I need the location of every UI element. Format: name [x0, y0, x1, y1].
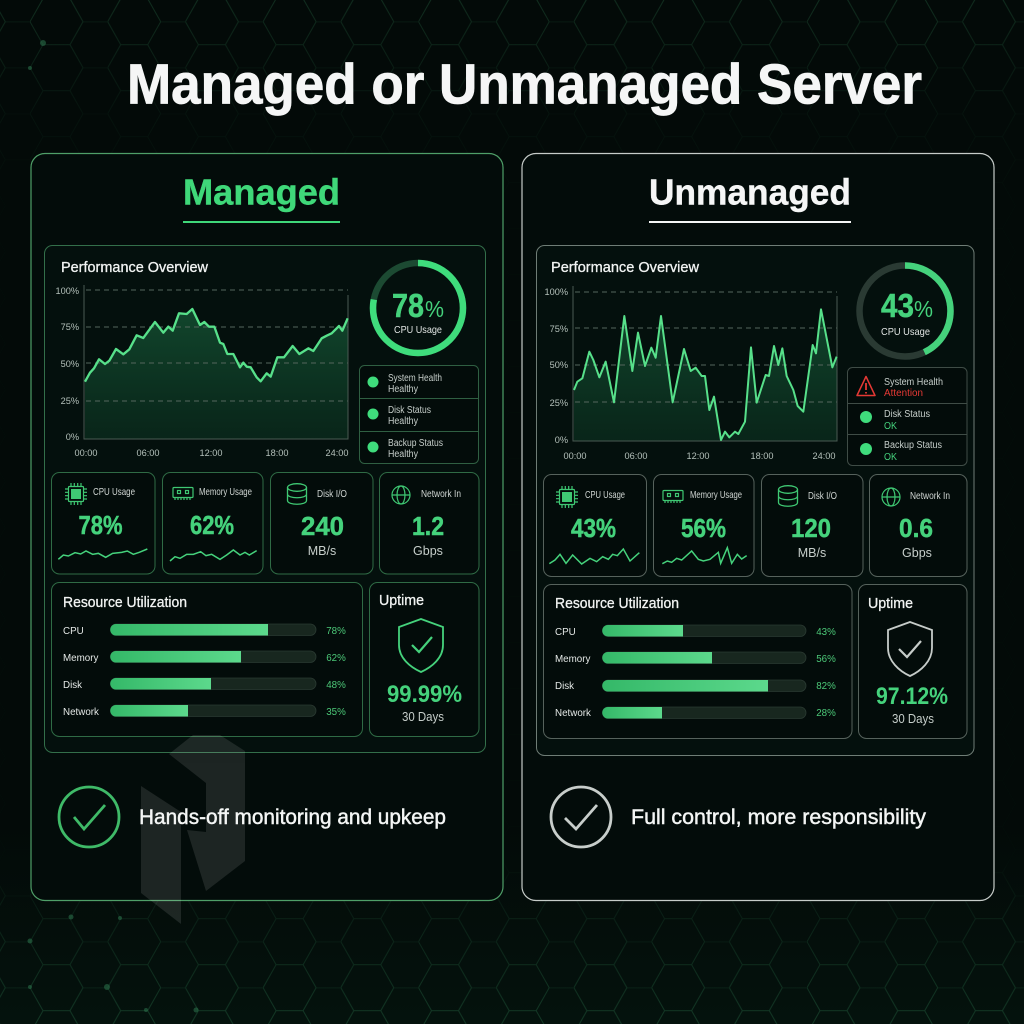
status list: Disk Status: [884, 409, 930, 420]
heading: managed: Managed: [183, 172, 340, 212]
bar: memory: [555, 652, 836, 665]
gauge: cpu usage 43%: 43: [881, 287, 914, 324]
bar: network: [555, 707, 836, 719]
sparkline: [58, 549, 147, 559]
metric card: network in: Gbps: [413, 544, 443, 558]
bar: cpu: CPU: [63, 626, 84, 637]
icon: memory: [663, 490, 683, 503]
metric card: memory usage: [654, 474, 754, 576]
status list: System Health: [388, 373, 442, 384]
panel: resource utilization: Resource Utilization: [555, 596, 679, 612]
callout: unmanaged: [551, 787, 926, 847]
metric card: disk io: MB/s: [308, 544, 336, 558]
panel: uptime: Uptime: [379, 592, 424, 609]
metric card: memory usage: [162, 472, 263, 574]
title: Managed or Unmanaged Server: [127, 52, 922, 116]
bar: network: 35%: [326, 707, 346, 718]
metric card: cpu usage: 78%: [78, 510, 122, 540]
metric card: network in: 1.2: [412, 511, 444, 541]
heading: performance overview: Performance Overview: [551, 260, 700, 276]
metric card: network in: [870, 474, 967, 576]
line chart: performance: 00:00: [74, 448, 98, 458]
callout: managed: [59, 787, 446, 847]
icon: database: [288, 484, 306, 504]
icon: shield: [399, 619, 443, 672]
panel: resource utilization: [544, 584, 852, 738]
sparkline: [170, 550, 257, 561]
status list: Backup Status: [388, 438, 443, 449]
status list: OK: [884, 452, 897, 463]
metric card: disk io: Disk I/O: [808, 490, 837, 502]
bar: memory: Memory: [63, 653, 98, 664]
metric card: network in: [380, 472, 479, 574]
icon: shield: [888, 622, 932, 676]
bar: network: Network: [555, 708, 591, 719]
panel: uptime: Uptime: [868, 595, 913, 612]
bar: disk: Disk: [555, 681, 574, 692]
panel: uptime: 30 Days: [402, 710, 444, 724]
bar: cpu: 43%: [816, 627, 836, 638]
line chart: performance: 25%: [61, 396, 79, 406]
gauge: cpu usage 43%: [860, 266, 950, 356]
metric card: network in: Network In: [910, 490, 950, 502]
metric card: memory usage: 56%: [681, 513, 726, 543]
status list: Healthy: [388, 449, 418, 460]
line chart: performance: 100%: [56, 286, 79, 296]
bar: disk: [63, 678, 346, 691]
gauge: cpu usage 78%: %: [425, 296, 444, 322]
dashboard: managed: [44, 246, 486, 752]
metric card: memory usage: Memory Usage: [690, 489, 742, 501]
panel: uptime: 30 Days: [892, 712, 934, 726]
line chart: performance: 06:00: [136, 448, 160, 458]
metric card: cpu usage: 43%: [571, 513, 616, 543]
bar: network: 28%: [816, 708, 836, 719]
metric card: disk io: 240: [301, 511, 344, 541]
status list: System Health: [884, 377, 943, 388]
bar: disk: [555, 680, 836, 692]
line chart: performance: 06:00: [624, 451, 648, 461]
metric card: network in: Network In: [421, 488, 461, 500]
sparkline: [662, 548, 747, 564]
icon: chip: [65, 483, 87, 505]
panel: resource utilization: [52, 582, 362, 736]
line chart: performance: 75%: [61, 322, 79, 332]
callout: unmanaged: Full control, more responsibility: [631, 805, 926, 829]
metric card: cpu usage: [544, 474, 646, 576]
line chart: performance: 50%: [550, 360, 568, 370]
metric card: memory usage: Memory Usage: [199, 486, 252, 498]
icon: check circle: [551, 787, 611, 847]
line chart: performance: 12:00: [200, 448, 222, 458]
line chart: performance: 75%: [550, 324, 568, 334]
metric card: cpu usage: CPU Usage: [585, 489, 625, 501]
sparkline: [549, 549, 639, 564]
panel: uptime: [858, 584, 967, 738]
line chart: performance: 0%: [555, 435, 568, 445]
bar: network: [63, 705, 346, 718]
metric card: cpu usage: CPU Usage: [93, 486, 135, 498]
bar: cpu: 78%: [326, 626, 346, 637]
bar: memory: [63, 651, 346, 664]
icon: globe: [882, 488, 900, 506]
panel: managed: [31, 154, 503, 924]
line chart: performance: 24:00: [812, 451, 836, 461]
line chart: performance: 00:00: [564, 451, 586, 461]
bar: cpu: CPU: [555, 627, 576, 638]
bar: memory: 56%: [816, 654, 836, 665]
status list: [360, 366, 478, 464]
gauge: cpu usage 78%: [373, 263, 463, 353]
status list: OK: [884, 421, 897, 432]
gauge: cpu usage 78%: 78: [392, 287, 424, 324]
metric card: disk io: Disk I/O: [317, 488, 347, 500]
metric card: network in: 0.6: [899, 513, 933, 543]
gauge: cpu usage 43%: CPU Usage: [881, 326, 930, 338]
bar: disk: Disk: [63, 680, 82, 691]
line chart: performance: 18:00: [266, 448, 288, 458]
line chart: performance: 18:00: [750, 451, 774, 461]
icon: warning: [857, 376, 875, 396]
heading: performance overview: Performance Overview: [61, 260, 209, 276]
bar: disk: 82%: [816, 681, 836, 692]
icon: globe: [392, 486, 410, 504]
metric card: disk io: [762, 474, 863, 576]
icon: check circle: [59, 787, 119, 847]
line chart: performance: 24:00: [326, 448, 348, 458]
line chart: performance: [56, 285, 348, 458]
line chart: performance: 0%: [66, 432, 79, 442]
status list: Backup Status: [884, 440, 942, 451]
status list: [848, 368, 967, 466]
metric card: disk io: 120: [791, 513, 831, 543]
panel: uptime: 97.12%: [876, 683, 948, 710]
bar: disk: 48%: [326, 680, 346, 691]
metric card: network in: Gbps: [902, 546, 932, 560]
metric card: disk io: MB/s: [798, 546, 826, 560]
line chart: performance: 100%: [544, 287, 568, 297]
bar: cpu: [63, 624, 346, 637]
metric card: memory usage: 62%: [190, 510, 234, 540]
gauge: cpu usage 43%: %: [914, 296, 933, 322]
dashboard: unmanaged: [536, 246, 974, 756]
status list: Healthy: [388, 416, 418, 427]
metric card: cpu usage: [52, 472, 155, 574]
panel: uptime: 99.99%: [387, 681, 462, 708]
status list: Disk Status: [388, 405, 431, 416]
icon: chip: [556, 486, 578, 508]
gauge: cpu usage 78%: CPU Usage: [394, 324, 442, 336]
bar: memory: Memory: [555, 654, 590, 665]
line chart: performance: 25%: [550, 398, 568, 408]
heading: unmanaged: Unmanaged: [649, 172, 851, 212]
line chart: performance: [544, 286, 837, 461]
panel: uptime: [370, 582, 479, 736]
panel: resource utilization: Resource Utilization: [63, 595, 187, 611]
metric card: disk io: [270, 472, 373, 574]
status list: Healthy: [388, 384, 418, 395]
line chart: performance: 50%: [61, 359, 79, 369]
bar: memory: 62%: [326, 653, 346, 664]
bar: network: Network: [63, 707, 99, 718]
bar: cpu: [555, 625, 836, 638]
callout: managed: Hands-off monitoring and upkeep: [139, 805, 446, 829]
status list: Attention: [884, 388, 923, 399]
icon: memory: [173, 488, 193, 500]
logo watermark: [141, 735, 245, 924]
line chart: performance: 12:00: [686, 451, 710, 461]
icon: database: [778, 486, 798, 506]
panel: unmanaged: [522, 154, 994, 900]
